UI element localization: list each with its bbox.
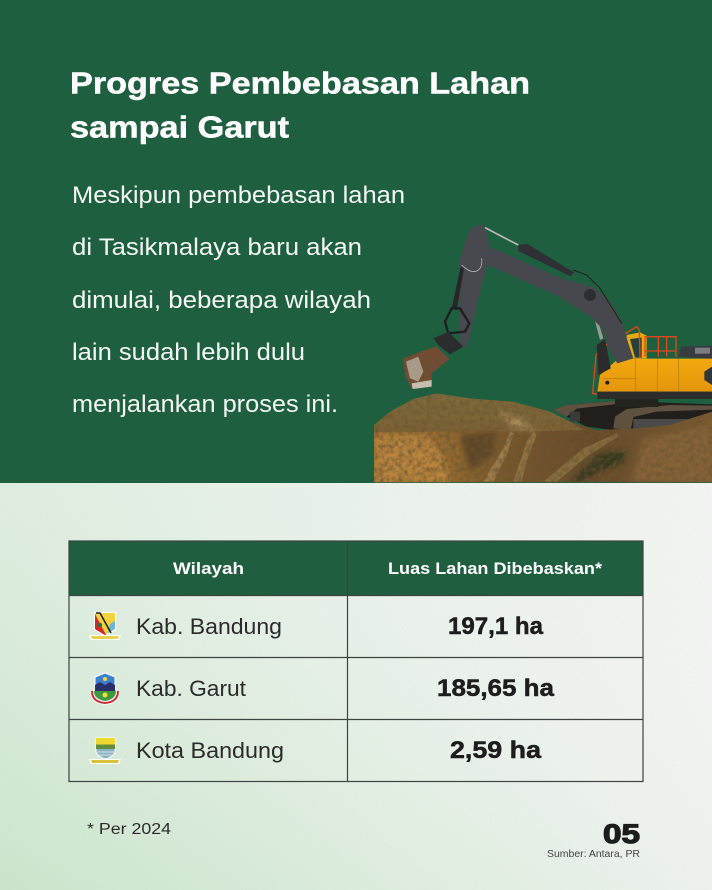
title: Progres Pembebasan Lahan [70, 66, 530, 100]
intro paragraph: menjalankan proses ini. [72, 391, 338, 418]
page number: 05 [603, 819, 640, 849]
icon: Kab. Bandung crest [89, 612, 121, 640]
intro paragraph [72, 182, 405, 418]
source credit: Sumber: Antara, PR [547, 848, 640, 860]
title: sampai Garut [70, 110, 289, 144]
illustration: excavator on dirt mound [374, 224, 712, 482]
table header row: Wilayah [173, 559, 244, 578]
table header row [69, 541, 643, 595]
intro paragraph: lain sudah lebih dulu [72, 339, 305, 366]
excavator boom [483, 228, 633, 375]
row: Kab. Garut: Kab. Garut [136, 676, 246, 701]
panel: green header background [0, 0, 712, 483]
table header row: Luas Lahan Dibebaskan* [388, 559, 602, 578]
excavator body [593, 327, 712, 399]
row: Kota Bandung: 2,59 ha [450, 737, 542, 764]
excavator stick arm [433, 224, 489, 354]
table grid lines [69, 541, 643, 782]
row: Kab. Bandung: 197,1 ha [448, 613, 544, 640]
excavator tracks [553, 398, 712, 430]
row: Kab. Garut [92, 673, 555, 703]
intro paragraph: dimulai, beberapa wilayah [72, 287, 371, 314]
table [69, 541, 643, 782]
dirt mound [374, 393, 712, 482]
row: Kota Bandung: Kota Bandung [136, 738, 284, 763]
footnote: * Per 2024 [87, 821, 171, 838]
row: Kab. Bandung [89, 612, 544, 640]
page background: pale green paper [0, 483, 712, 890]
intro paragraph: di Tasikmalaya baru akan [72, 234, 362, 261]
icon: Kota Bandung crest [89, 738, 121, 764]
row: Kab. Garut: 185,65 ha [437, 675, 555, 702]
intro paragraph: Meskipun pembebasan lahan [72, 182, 405, 209]
title [70, 66, 530, 144]
excavator bucket [403, 347, 449, 389]
row: Kab. Bandung: Kab. Bandung [136, 614, 282, 639]
row: Kota Bandung [89, 737, 542, 764]
icon: Kab. Garut crest [92, 673, 118, 703]
